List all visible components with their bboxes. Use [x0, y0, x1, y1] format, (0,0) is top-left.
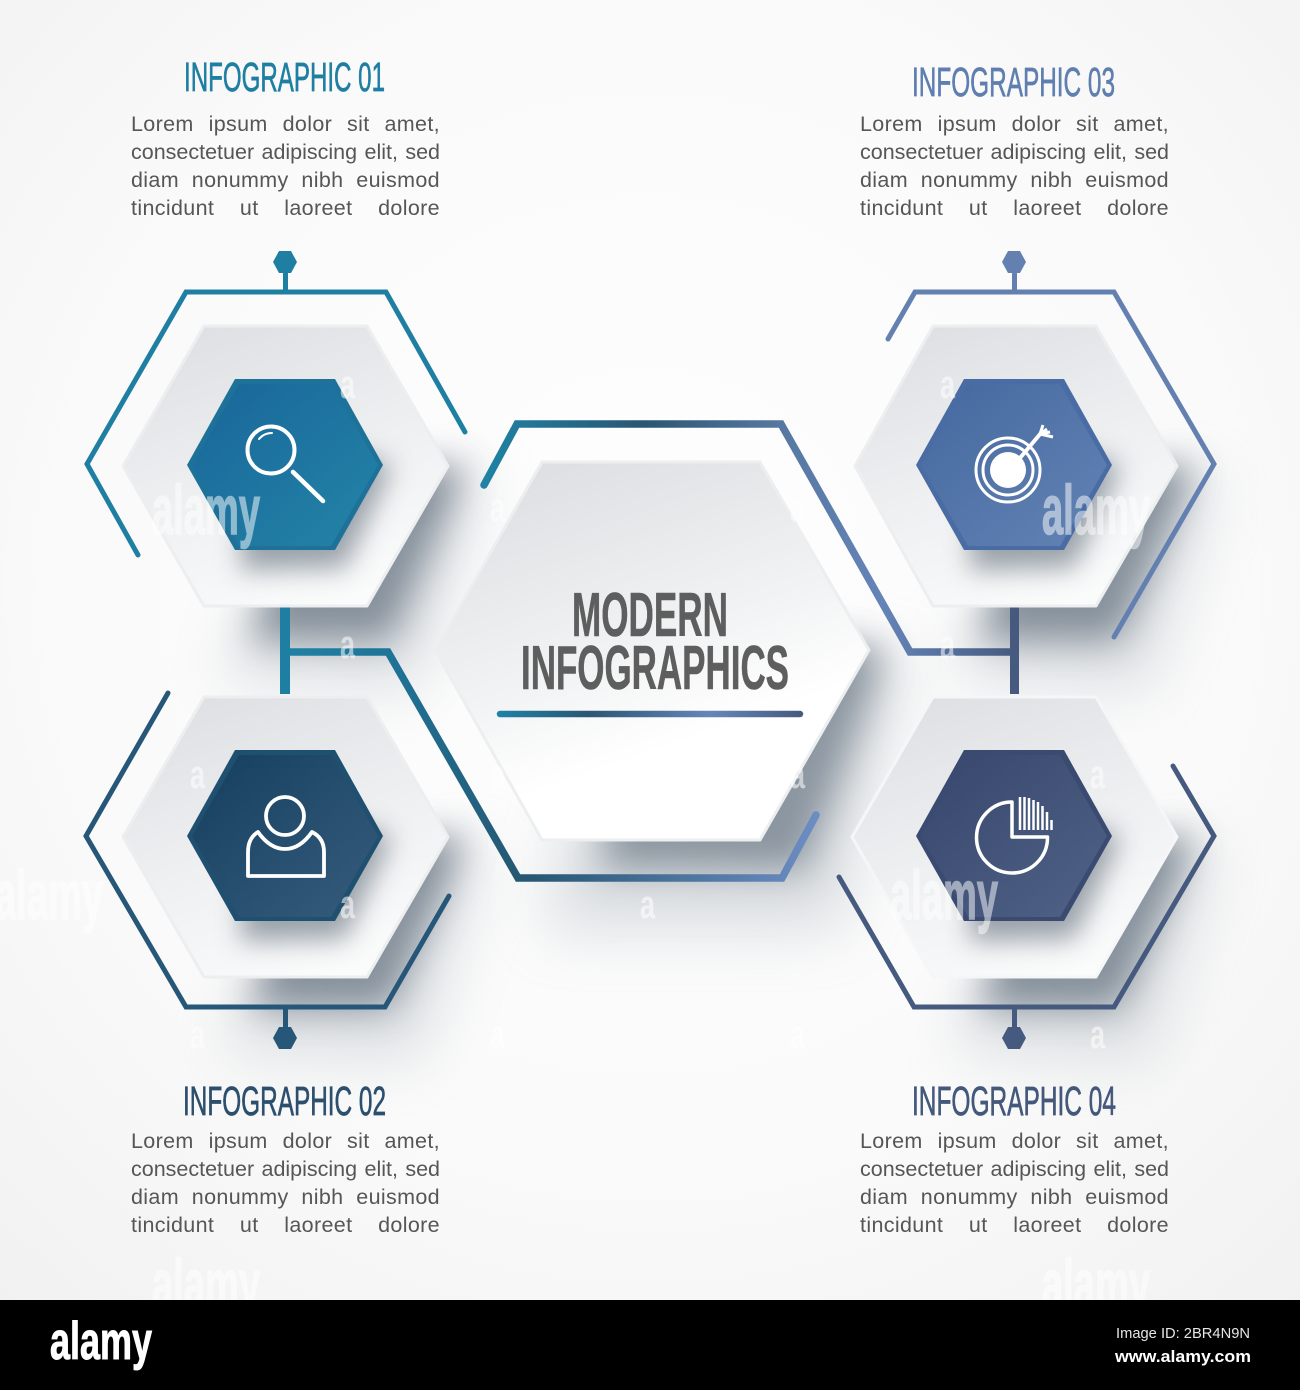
watermark overlay: alamy — [152, 471, 260, 549]
watermark overlay: a — [940, 363, 956, 407]
footer image id: Image ID: 2BR4N9N — [1116, 1325, 1250, 1342]
watermark overlay — [0, 363, 1150, 1323]
watermark overlay: a — [940, 623, 956, 667]
text block: Infographic 03: consectetuer adipiscing elit, sed — [860, 140, 1169, 164]
watermark overlay: alamy — [890, 856, 998, 934]
outline: centre hexagon top and right connector — [484, 424, 1014, 652]
watermark overlay: a — [340, 883, 356, 927]
footer band — [0, 1300, 1300, 1390]
watermark overlay: a — [490, 753, 506, 797]
panel: centre hexagon — [435, 462, 869, 840]
text block: Infographic 01: Lorem ipsum dolor sit amet, — [131, 112, 440, 136]
outline: hexagon 03 with marker — [888, 251, 1214, 694]
watermark overlay: a — [340, 623, 356, 667]
watermark overlay: a — [790, 486, 806, 530]
text block: Infographic 04: consectetuer adipiscing elit, sed — [860, 1157, 1169, 1181]
text block: Infographic 02: diam nonummy nibh euismod — [131, 1185, 440, 1209]
watermark overlay: a — [1090, 753, 1106, 797]
watermark overlay: a — [490, 486, 506, 530]
watermark overlay: a — [790, 753, 806, 797]
watermark overlay: a — [790, 1013, 806, 1057]
text block: Infographic 04 — [860, 1129, 1169, 1237]
watermark overlay: alamy — [1042, 1245, 1150, 1323]
text block: Infographic 03: Lorem ipsum dolor sit amet, — [860, 112, 1169, 136]
footer logo: alamy — [50, 1312, 152, 1371]
watermark overlay: a — [340, 363, 356, 407]
heading: Infographic 03: INFOGRAPHIC 03 — [912, 59, 1115, 105]
text block: Infographic 03 — [860, 112, 1169, 220]
panel: hexagon 02 — [123, 697, 448, 977]
text block: Infographic 02: tincidunt ut laoreet dolore — [131, 1213, 440, 1237]
heading: Infographic 01: INFOGRAPHIC 01 — [184, 54, 385, 100]
watermark overlay: a — [490, 1013, 506, 1057]
panel: hexagon 01 — [123, 326, 448, 606]
watermark overlay: alamy — [1042, 471, 1150, 549]
text block: Infographic 01 — [131, 112, 440, 220]
footer url: www.alamy.com — [1114, 1347, 1251, 1366]
text block: Infographic 02: Lorem ipsum dolor sit amet, — [131, 1129, 440, 1153]
text block: Infographic 03: diam nonummy nibh euismod — [860, 168, 1169, 192]
watermark overlay: alamy — [152, 1245, 260, 1323]
text block: Infographic 04: tincidunt ut laoreet dolore — [860, 1213, 1169, 1237]
panel: hexagon 03 — [855, 326, 1177, 606]
heading: Infographic 02: INFOGRAPHIC 02 — [183, 1078, 386, 1124]
outline: hexagon 01 with marker — [87, 251, 465, 694]
watermark overlay: a — [190, 1013, 206, 1057]
outline: hexagon 02 with marker — [86, 693, 449, 1049]
icon: person — [248, 797, 324, 876]
icon: pie chart — [977, 797, 1052, 873]
title: Modern Infographics — [521, 581, 789, 703]
watermark overlay: a — [640, 883, 656, 927]
outline: hexagon 04 with marker — [839, 766, 1214, 1049]
icon: target with arrow — [976, 425, 1053, 502]
text block: Infographic 04: Lorem ipsum dolor sit amet, — [860, 1129, 1169, 1153]
text block: Infographic 02: consectetuer adipiscing elit, sed — [131, 1157, 440, 1181]
panel: hexagon 04 — [852, 697, 1177, 977]
title: Modern Infographics: INFOGRAPHICS — [521, 634, 789, 703]
text block: Infographic 02 — [131, 1129, 440, 1237]
text block: Infographic 01: tincidunt ut laoreet dolore — [131, 196, 440, 220]
watermark overlay: alamy — [0, 856, 103, 934]
watermark overlay: a — [1090, 1013, 1106, 1057]
outline: centre hexagon bottom and left connector — [285, 652, 816, 878]
heading: Infographic 04: INFOGRAPHIC 04 — [912, 1078, 1116, 1124]
watermark overlay: a — [190, 753, 206, 797]
title underline — [500, 711, 800, 717]
icon: magnifying glass — [248, 426, 323, 501]
text block: Infographic 01: diam nonummy nibh euismod — [131, 168, 440, 192]
title: Modern Infographics: MODERN — [572, 581, 728, 650]
text block: Infographic 03: tincidunt ut laoreet dolore — [860, 196, 1169, 220]
text block: Infographic 04: diam nonummy nibh euismod — [860, 1185, 1169, 1209]
text block: Infographic 01: consectetuer adipiscing elit, sed — [131, 140, 440, 164]
soft drop shadows behind panels — [220, 466, 1219, 1060]
